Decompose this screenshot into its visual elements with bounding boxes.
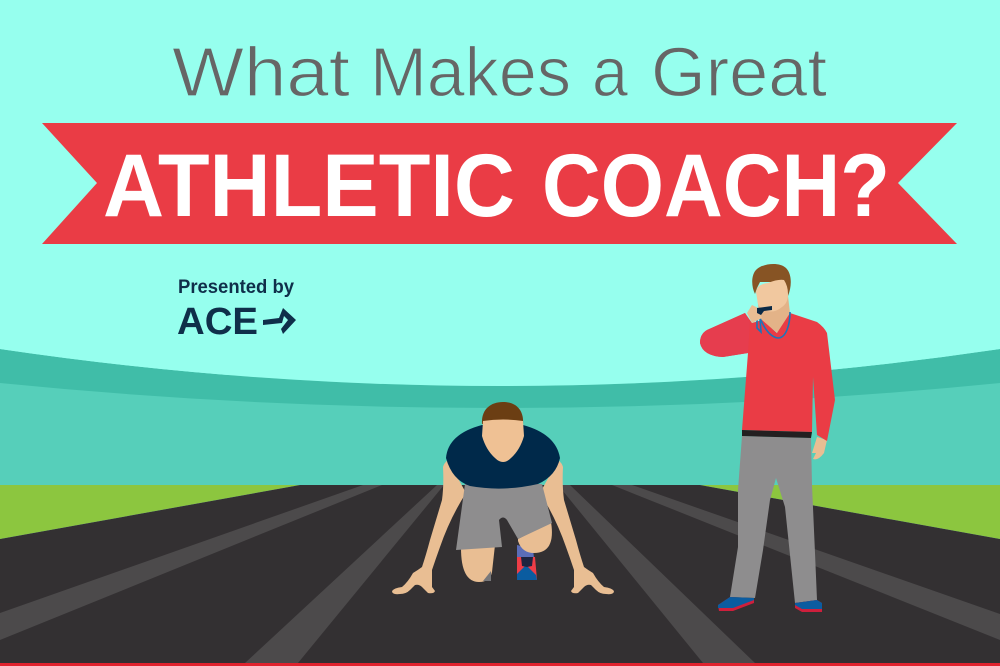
lanyard	[757, 312, 790, 338]
coach figure	[700, 264, 835, 612]
grey toe	[483, 571, 491, 581]
coach left hand	[812, 437, 827, 459]
coach shoes	[718, 597, 822, 612]
icon: ACE arrow	[263, 308, 296, 334]
running track	[0, 485, 1000, 666]
ACE wordmark: ACE	[177, 301, 258, 343]
title: a	[592, 33, 628, 111]
coach neck	[757, 296, 790, 333]
runner shirt	[446, 425, 560, 489]
runner left knee	[461, 545, 495, 582]
coach face	[756, 280, 788, 312]
runner right knee	[518, 522, 552, 553]
runner hair	[482, 402, 523, 424]
title	[172, 33, 827, 111]
banner	[42, 123, 957, 244]
coach hair	[752, 264, 791, 296]
coach sleeve	[700, 313, 750, 357]
presented by label: Presented by	[178, 277, 294, 298]
coach trousers	[730, 436, 817, 603]
banner heading: ATHLETIC	[103, 135, 515, 235]
stadium background	[0, 0, 1000, 486]
banner heading	[103, 135, 890, 235]
title: What	[172, 33, 350, 111]
coach belt	[742, 430, 812, 438]
runner shorts	[456, 484, 552, 550]
runner right arm	[540, 460, 614, 594]
runner figure	[392, 402, 614, 594]
runner left arm	[392, 460, 466, 594]
coach hand	[747, 305, 762, 323]
presenter logo	[177, 277, 296, 343]
title: Great	[651, 33, 827, 111]
title: Makes	[370, 33, 571, 111]
banner heading: COACH?	[542, 135, 890, 235]
runner face	[482, 420, 524, 462]
grass	[0, 485, 1000, 539]
coach sweater	[700, 313, 835, 441]
runner shoe	[517, 545, 537, 580]
whistle	[757, 306, 772, 315]
